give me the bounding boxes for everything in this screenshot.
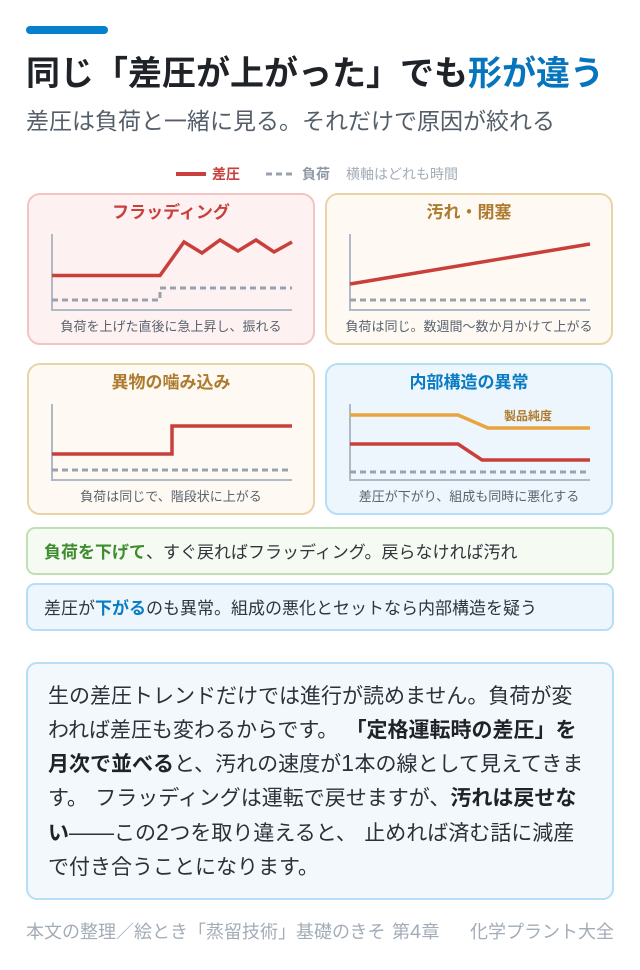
body text panel: 月次で並べると、汚れの速度が1本の線として見えてきま	[48, 750, 583, 776]
body text panel: い——この2つを取り違えると、 止めれば済む話に減産	[48, 819, 574, 845]
legend: 横軸はどれも時間	[346, 166, 458, 182]
chart: internals	[350, 404, 590, 480]
title: 同じ「差圧が上がった」でも形が違う	[26, 55, 604, 93]
panel: fouling	[325, 193, 613, 345]
chart: flooding	[52, 234, 292, 310]
caption: internals: 差圧が下がり、組成も同時に悪化する	[359, 489, 579, 504]
caption: flooding: 負荷を上げた直後に急上昇し、振れる	[60, 319, 282, 334]
callout: green	[26, 527, 614, 575]
footer source: 本文の整理／絵とき「蒸留技術」基礎のきそ 第4章	[26, 921, 439, 943]
caption: foreign matter: 負荷は同じで、階段状に上がる	[80, 489, 262, 504]
callout: green: 負荷を下げて、すぐ戻ればフラッディング。戻らなければ汚れ	[44, 543, 517, 562]
label: product purity: 製品純度	[504, 408, 552, 423]
heading: flooding: フラッディング	[112, 202, 230, 222]
chart: foreign matter	[52, 404, 292, 480]
legend: 差圧	[212, 166, 240, 182]
legend: 負荷	[302, 166, 330, 182]
heading: internals: 内部構造の異常	[410, 373, 528, 392]
heading: fouling: 汚れ・閉塞	[426, 203, 512, 222]
footer brand: 化学プラント大全	[470, 922, 614, 942]
legend	[176, 166, 458, 182]
callout: blue: 差圧が下がるのも異常。組成の悪化とセットなら内部構造を疑う	[44, 599, 537, 618]
body text panel: われば差圧も変わるからです。 「定格運転時の差圧」を	[48, 719, 577, 742]
accent bar	[26, 26, 108, 34]
chart: fouling	[350, 234, 590, 310]
body text panel: 生の差圧トレンドだけでは進行が読めません。負荷が変	[48, 685, 572, 708]
panel: flooding	[27, 193, 315, 345]
caption: fouling: 負荷は同じ。数週間〜数か月かけて上がる	[345, 319, 593, 334]
body text panel	[26, 662, 614, 900]
panel: foreign matter	[27, 363, 315, 515]
callout: blue	[26, 583, 614, 631]
body text panel: で付き合うことになります。	[48, 856, 319, 879]
panel: internals	[325, 363, 613, 515]
subtitle: 差圧は負荷と一緒に見る。それだけで原因が絞れる	[26, 108, 555, 134]
heading: foreign matter: 異物の噛み込み	[112, 373, 230, 392]
body text panel: す。 フラッディングは運転で戻せますが、汚れは戻せな	[48, 787, 576, 810]
